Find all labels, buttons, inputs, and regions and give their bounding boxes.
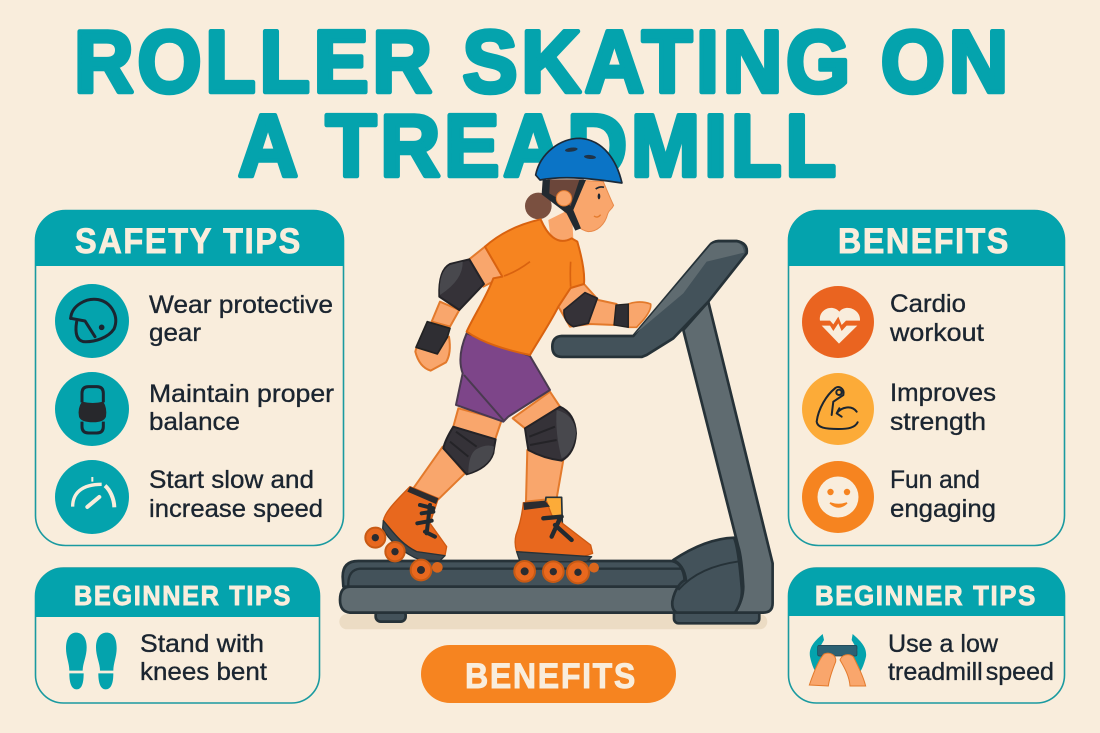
text: wear protective gear: Wear protective: [149, 291, 333, 319]
shirt: [467, 219, 584, 355]
helmet strap: [542, 180, 586, 231]
text: fun and engaging: Fun and: [890, 466, 980, 494]
text: improves strength: strength: [890, 408, 986, 436]
icon: hands on bar: [809, 634, 866, 686]
text: cardio workout: [889, 290, 984, 347]
belt: [343, 561, 685, 587]
text: stand with knees bent: knees bent: [140, 658, 267, 686]
safety tips heading: SAFETY TIPS: [75, 222, 302, 261]
text: cardio workout: Cardio: [890, 290, 966, 318]
shorts: [456, 333, 550, 422]
panel: beginner tips left: [35, 568, 320, 703]
front leg: [513, 392, 599, 583]
icon: speedometer: [55, 460, 129, 534]
beginner tips right heading: BEGINNER TIPS: [815, 580, 1037, 611]
console highlight: [635, 243, 744, 334]
motor cover: [672, 538, 742, 613]
back arm: [415, 247, 503, 371]
benefits heading: BENEFITS: [838, 222, 1010, 261]
icon: muscle: [802, 373, 874, 445]
benefits header: [788, 210, 1065, 266]
text: wear protective gear: [149, 291, 333, 347]
front wrist guard: [614, 304, 628, 327]
back leg: [365, 408, 502, 580]
text: start slow and increase speed: [149, 466, 323, 523]
text: cardio workout: workout: [889, 319, 984, 347]
title: [74, 12, 1012, 195]
beginner tips left heading: BEGINNER TIPS: [74, 580, 292, 611]
text: start slow and increase speed: Start slow and: [149, 466, 314, 494]
front arm: [558, 284, 617, 327]
text: maintain proper balance: Maintain proper: [149, 380, 334, 408]
hair bun: [525, 193, 552, 219]
text: stand with knees bent: [140, 630, 267, 686]
back thigh: [453, 408, 502, 440]
front skate: [514, 497, 599, 583]
text: maintain proper balance: balance: [149, 408, 240, 436]
console body: [552, 241, 747, 357]
front elbow pad: [564, 293, 597, 327]
right foot: [674, 607, 759, 623]
front knee pad: [525, 407, 576, 461]
text: improves strength: Improves: [890, 379, 996, 407]
text: improves strength: [890, 379, 996, 436]
text: fun and engaging: [890, 466, 996, 523]
back shin: [413, 447, 465, 499]
panel: benefits: [788, 210, 1065, 546]
icon: helmet: [55, 284, 129, 358]
title: ROLLER SKATING ON: [74, 12, 1012, 111]
pill button: benefits: [421, 645, 676, 703]
skater upper body: [415, 138, 651, 422]
left foot: [376, 610, 406, 622]
hair: [547, 179, 584, 207]
icon: heart: [802, 286, 874, 358]
front shin: [526, 450, 563, 502]
title: A TREADMILL: [238, 96, 840, 195]
safety tips header: [35, 210, 344, 266]
front hand: [628, 302, 651, 327]
text: use a low treadmill speed: treadmill speed: [888, 658, 1054, 686]
text: stand with knees bent: Stand with: [140, 630, 264, 658]
treadmill console: [552, 241, 747, 357]
eye, eyebrow and mouth: [594, 187, 604, 217]
treadmill: [339, 302, 773, 629]
text: maintain proper balance: [149, 380, 334, 436]
front thigh: [513, 392, 560, 428]
upright post: [683, 302, 773, 613]
floor shadow: [339, 614, 767, 629]
panel: beginner tips right: [788, 568, 1065, 703]
text: wear protective gear: gear: [149, 319, 201, 347]
back knee pad: [443, 427, 496, 474]
text: fun and engaging: engaging: [890, 495, 996, 523]
pill button: benefits: BENEFITS: [465, 657, 637, 696]
icon: smiley: [802, 461, 874, 533]
face and neck: [548, 208, 573, 242]
panel: safety tips: [35, 210, 344, 546]
icon: footprints: [66, 633, 117, 689]
text: start slow and increase speed: increase speed: [149, 495, 323, 523]
text: use a low treadmill speed: [888, 630, 1054, 686]
beginner tips left header: [35, 568, 320, 617]
deck side rail: [340, 587, 680, 613]
icon: balance: [55, 372, 129, 446]
back skate: [365, 487, 447, 580]
text: use a low treadmill speed: Use a low: [888, 630, 999, 658]
beginner tips right header: [788, 568, 1065, 616]
ear: [556, 191, 572, 206]
helmet: [536, 138, 622, 183]
